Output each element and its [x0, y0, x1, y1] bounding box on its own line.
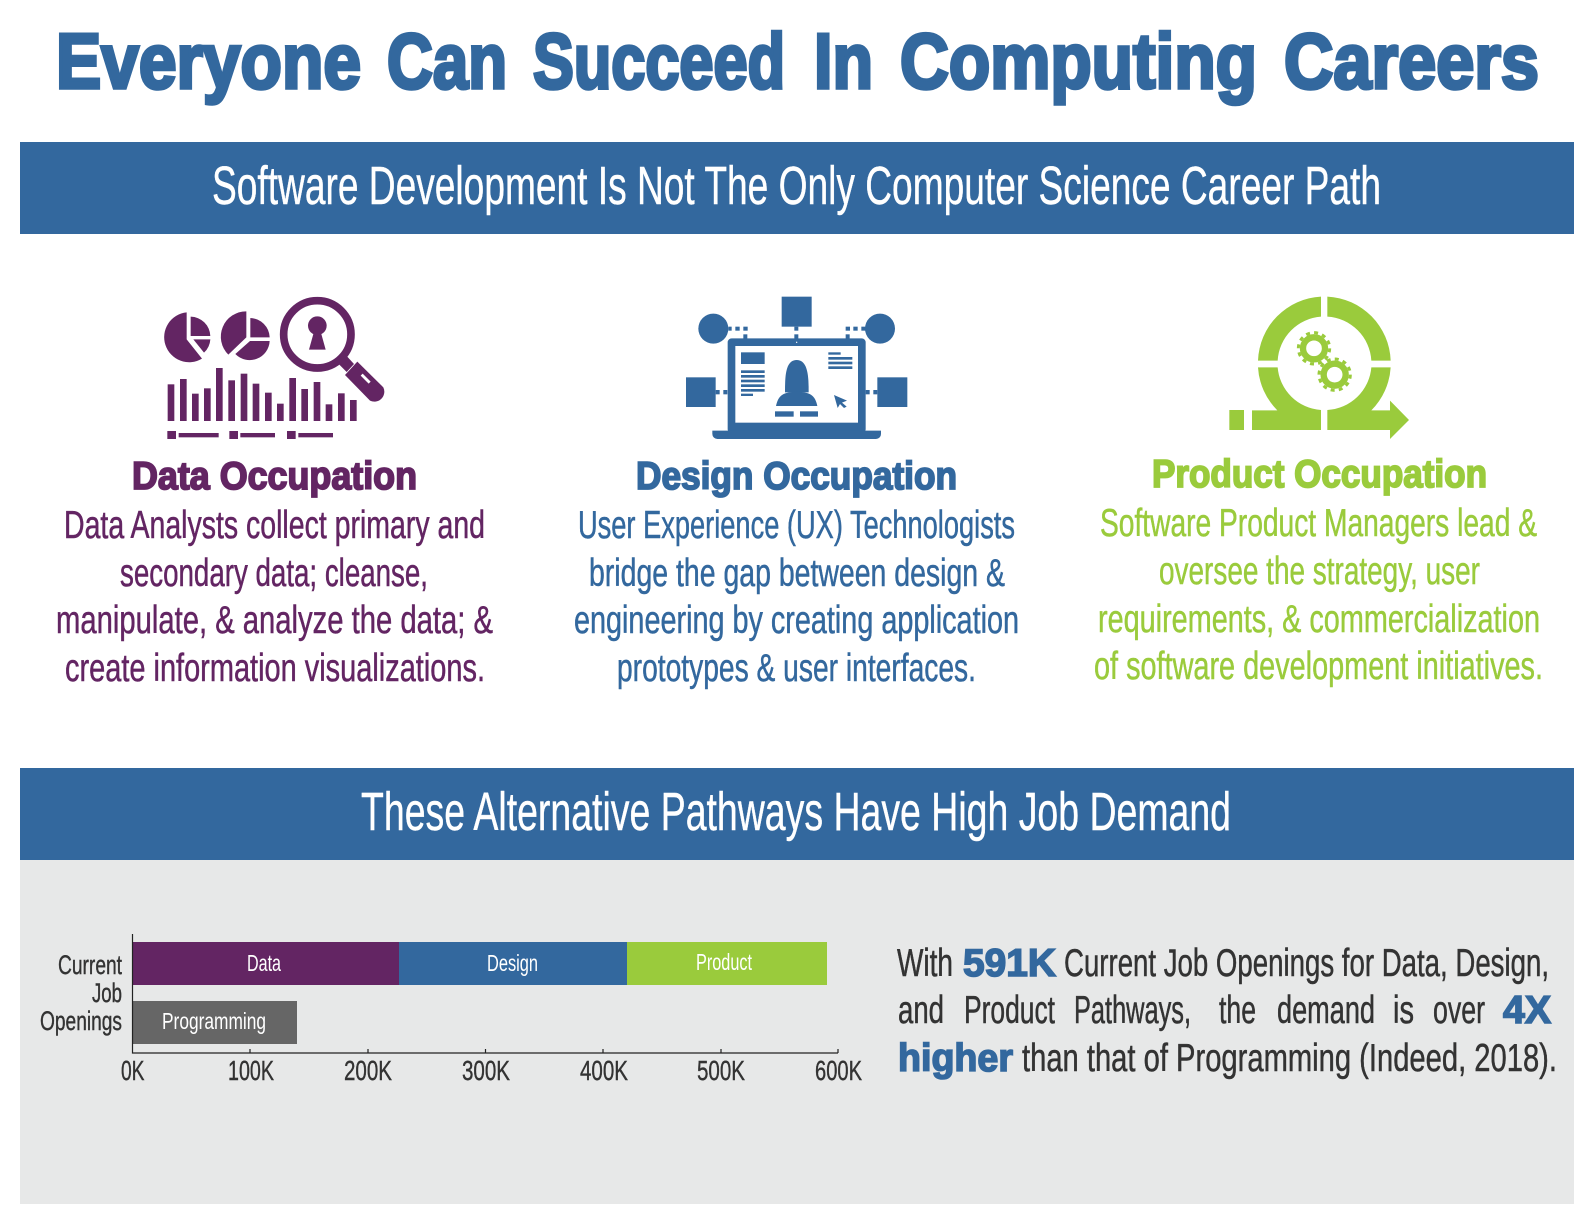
callout: job demand summary: 4X — [1503, 989, 1551, 1032]
text block: design description: User Experience (UX) Technologists — [578, 504, 1015, 547]
callout: job demand summary — [897, 942, 1557, 1080]
text block: design description — [574, 504, 1019, 690]
callout: job demand summary: demand — [1277, 989, 1375, 1032]
x axis labels: 200K — [344, 1055, 392, 1086]
title: Succeed — [533, 17, 785, 105]
callout: job demand summary: With — [897, 942, 953, 985]
title: In — [814, 17, 873, 105]
axis label: Openings — [40, 1006, 122, 1036]
text block: data description: secondary data; cleanse, — [120, 552, 428, 595]
bar: product: Product — [696, 949, 752, 975]
title: Careers — [1284, 17, 1539, 105]
panel: design occupation text — [574, 455, 1019, 690]
x axis labels: 600K — [815, 1055, 862, 1086]
callout: job demand summary: is — [1393, 989, 1414, 1032]
banner: job demand: These Alternative Pathways Have High Job Demand — [361, 782, 1231, 842]
banner: job demand — [20, 768, 1574, 860]
callout: job demand summary: the — [1219, 989, 1256, 1032]
axis label: Current — [58, 950, 122, 980]
bar: product — [627, 942, 827, 985]
bar: design — [399, 942, 627, 985]
panel: data occupation text — [56, 455, 493, 690]
title: Everyone — [56, 17, 361, 105]
axis label — [40, 950, 122, 1036]
bar: data: Data — [247, 950, 281, 976]
banner: career paths — [20, 142, 1574, 234]
callout: job demand summary: and — [898, 989, 944, 1032]
icon: data analysis — [164, 301, 384, 439]
heading: data occupation: Data Occupation — [132, 455, 417, 498]
text block: data description — [56, 504, 493, 690]
x axis labels: 0K — [121, 1055, 145, 1086]
title: Can — [387, 17, 507, 105]
bar chart: current job openings — [40, 934, 862, 1086]
callout: job demand summary: Pathways, — [1074, 989, 1191, 1032]
icon: design laptop — [686, 297, 907, 439]
text block: data description: create information visualizations. — [65, 647, 485, 690]
text block: design description: engineering by creating application — [574, 599, 1019, 642]
title: Computing — [900, 17, 1257, 105]
bar: programming — [132, 1001, 297, 1044]
icon: product cycle — [1229, 297, 1409, 439]
bar: design: Design — [487, 950, 538, 976]
axis label: Job — [92, 978, 122, 1008]
x axis labels: 500K — [697, 1055, 745, 1086]
callout: job demand summary: 591K — [963, 942, 1056, 985]
x axis labels: 300K — [462, 1055, 510, 1086]
text block: data description: manipulate, & analyze the data; & — [56, 599, 493, 642]
x axis labels: 100K — [228, 1055, 274, 1086]
x axis labels: 400K — [580, 1055, 628, 1086]
heading: design occupation: Design Occupation — [636, 455, 957, 498]
x axis labels — [121, 1055, 862, 1086]
heading: product occupation: Product Occupation — [1152, 453, 1487, 496]
callout: job demand summary: higher — [898, 1037, 1013, 1080]
callout: job demand summary: over — [1433, 989, 1485, 1032]
title — [56, 17, 1539, 105]
text block: product description — [1094, 502, 1543, 688]
callout: job demand summary: Product — [964, 989, 1055, 1032]
text block: design description: bridge the gap between design & — [589, 552, 1005, 595]
text block: design description: prototypes & user interfaces. — [617, 647, 976, 690]
bar: data — [132, 942, 399, 985]
bar: programming: Programming — [162, 1008, 266, 1034]
panel: job demand background — [20, 860, 1574, 1204]
text block: product description: oversee the strategy, user — [1159, 550, 1480, 593]
panel: product occupation text — [1094, 453, 1543, 688]
text block: data description: Data Analysts collect primary and — [64, 504, 485, 547]
